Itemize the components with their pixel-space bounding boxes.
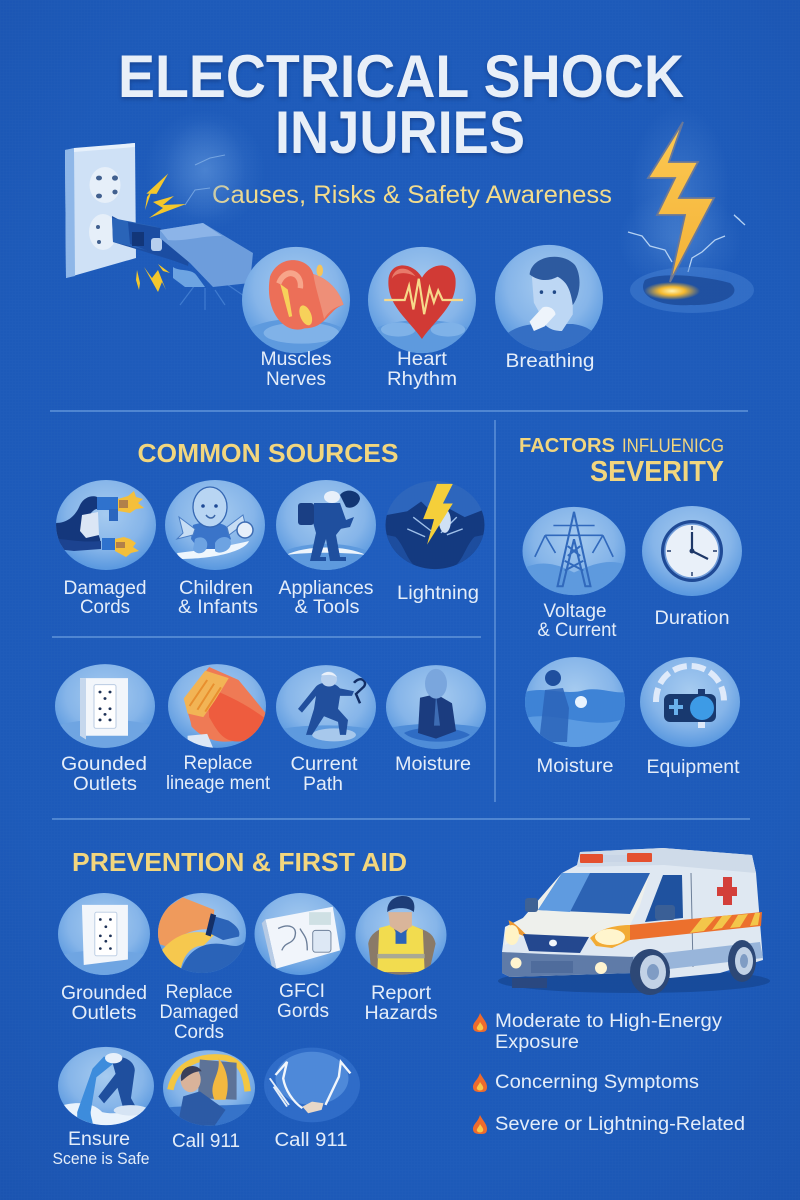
heading: factors influencing severity: FACTORS xyxy=(519,435,615,457)
factor: moisture, water: Moisture xyxy=(536,756,614,777)
prevention: grounded outlets xyxy=(55,664,155,795)
heading: factors influencing severity: INFLUENICG xyxy=(622,436,724,457)
factor: voltage and current xyxy=(522,507,626,641)
prevention: grounded outlets: Gounded xyxy=(61,754,147,775)
source: appliances and tools: & Tools xyxy=(294,597,360,618)
first aid: replace damaged cords xyxy=(158,893,246,1043)
first aid: replace damaged cords: Cords xyxy=(174,1022,224,1043)
prevention: replace lineage: lineage ment xyxy=(166,773,271,794)
first aid: report hazards xyxy=(356,895,446,1024)
first aid: call 911, person: Call 911 xyxy=(172,1131,240,1152)
first aid: replace damaged cords: Damaged xyxy=(160,1002,238,1023)
factor: voltage and current: Voltage xyxy=(544,601,606,622)
icon: flame xyxy=(473,1013,487,1032)
factor: duration xyxy=(642,506,742,629)
first aid: call 911, handshake: Call 911 xyxy=(274,1130,348,1151)
first aid: grounded outlets xyxy=(58,893,150,1024)
bullet list: Exposure xyxy=(495,1032,579,1053)
prevention: replace lineage: Replace xyxy=(184,753,252,774)
ambulance xyxy=(498,848,770,995)
first aid: ensure scene is safe xyxy=(52,1047,154,1168)
factor: equipment xyxy=(640,657,740,778)
source: children and infants: Children xyxy=(179,578,253,599)
first aid: report hazards: Hazards xyxy=(364,1003,438,1024)
bullet list xyxy=(473,1011,745,1135)
symptom: heart rhythm xyxy=(366,247,478,390)
factor: duration: Duration xyxy=(654,608,730,629)
heading: factors influencing severity xyxy=(519,435,724,488)
source: lightning: Lightning xyxy=(397,583,479,604)
symptom: breathing: Breathing xyxy=(506,351,594,372)
prevention: replace lineage xyxy=(166,664,271,794)
factor: moisture xyxy=(386,665,486,775)
first aid: GFCI cords: GFCI xyxy=(279,981,325,1002)
source: children and infants: & Infants xyxy=(178,597,258,618)
first aid: GFCI cords: Gords xyxy=(277,1001,329,1022)
first aid: call 911, person xyxy=(163,1050,255,1152)
symptom: muscles and nerves xyxy=(240,247,352,390)
first aid: GFCI cords xyxy=(254,893,346,1022)
source: damaged cords: Cords xyxy=(80,597,130,618)
factor: voltage and current: & Current xyxy=(538,620,617,641)
bullet list: Moderate to High-Energy xyxy=(495,1011,723,1032)
first aid: grounded outlets: Outlets xyxy=(72,1003,136,1024)
first aid: ensure scene is safe: Ensure xyxy=(68,1129,130,1150)
title xyxy=(118,43,684,166)
factor: current path xyxy=(276,665,376,795)
factor: current path: Path xyxy=(303,774,343,795)
source: appliances and tools: Appliances xyxy=(278,578,374,599)
bullet list: Concerning Symptoms xyxy=(495,1072,699,1093)
first aid: call 911, handshake xyxy=(264,1048,360,1151)
illustration: lightning strike xyxy=(618,105,754,313)
bullet list: Severe or Lightning-Related xyxy=(495,1114,745,1135)
heading: common sources: COMMON SOURCES xyxy=(138,438,398,468)
prevention: grounded outlets: Outlets xyxy=(73,774,137,795)
first aid: grounded outlets: Grounded xyxy=(61,983,147,1004)
source: lightning xyxy=(386,481,484,604)
illustration: hand plugging into wall outlet xyxy=(65,110,265,310)
symptom: heart rhythm: Rhythm xyxy=(387,369,457,390)
divider xyxy=(50,411,750,819)
factor: moisture, water xyxy=(525,657,625,777)
title: INJURIES xyxy=(275,99,525,166)
source: children and infants xyxy=(165,480,265,618)
factor: moisture: Moisture xyxy=(395,754,471,775)
factor: current path: Current xyxy=(290,754,358,775)
subtitle: Causes, Risks & Safety Awareness xyxy=(212,181,612,209)
heading: factors influencing severity: SEVERITY xyxy=(590,456,724,488)
first aid: report hazards: Report xyxy=(371,983,432,1004)
heading: prevention and first aid: PREVENTION & FIRST AID xyxy=(72,847,407,877)
symptom: heart rhythm: Heart xyxy=(397,349,448,370)
icon: flame xyxy=(473,1073,487,1092)
symptom: breathing xyxy=(495,245,603,372)
source: damaged cords xyxy=(56,480,156,618)
first aid: replace damaged cords: Replace xyxy=(166,982,232,1003)
symptom: muscles and nerves: Nerves xyxy=(266,369,326,390)
factor: equipment: Equipment xyxy=(646,757,740,778)
source: appliances and tools xyxy=(276,480,376,618)
first aid: ensure scene is safe: Scene is Safe xyxy=(52,1149,150,1168)
symptom: muscles and nerves: Muscles xyxy=(260,349,332,370)
source: damaged cords: Damaged xyxy=(64,578,146,599)
icon: flame xyxy=(473,1115,487,1134)
title: ELECTRICAL SHOCK xyxy=(118,43,684,110)
